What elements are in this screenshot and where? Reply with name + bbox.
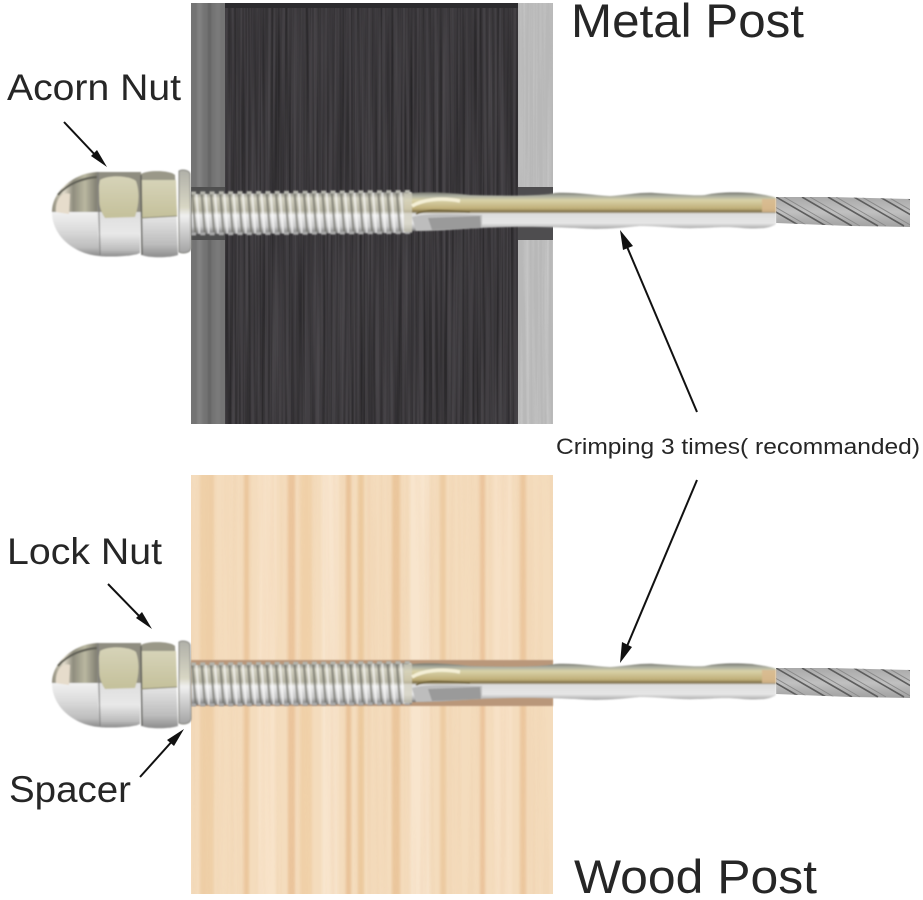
arrow: Lock Nut bbox=[108, 584, 152, 629]
fitting: wood post assembly bbox=[52, 641, 923, 728]
post dark centre bbox=[225, 3, 518, 424]
panel: wood post bbox=[191, 475, 553, 894]
post right edge strip bbox=[518, 3, 553, 424]
arrow: Spacer bbox=[140, 729, 184, 777]
arrow: crimping lower bbox=[620, 480, 697, 663]
label: Acorn Nut: Acorn Nut bbox=[7, 67, 182, 108]
panel: metal post bbox=[191, 3, 553, 424]
drilled hole bbox=[191, 660, 553, 706]
post left edge strip bbox=[191, 3, 225, 424]
arrow: Acorn Nut bbox=[64, 122, 107, 167]
label: Crimping note: Crimping 3 times( recommanded) bbox=[556, 434, 920, 459]
label: Lock Nut: Lock Nut bbox=[7, 531, 163, 572]
arrow: crimping upper bbox=[620, 230, 697, 412]
label: Spacer: Spacer bbox=[9, 769, 131, 810]
fitting: metal post assembly bbox=[52, 170, 923, 257]
